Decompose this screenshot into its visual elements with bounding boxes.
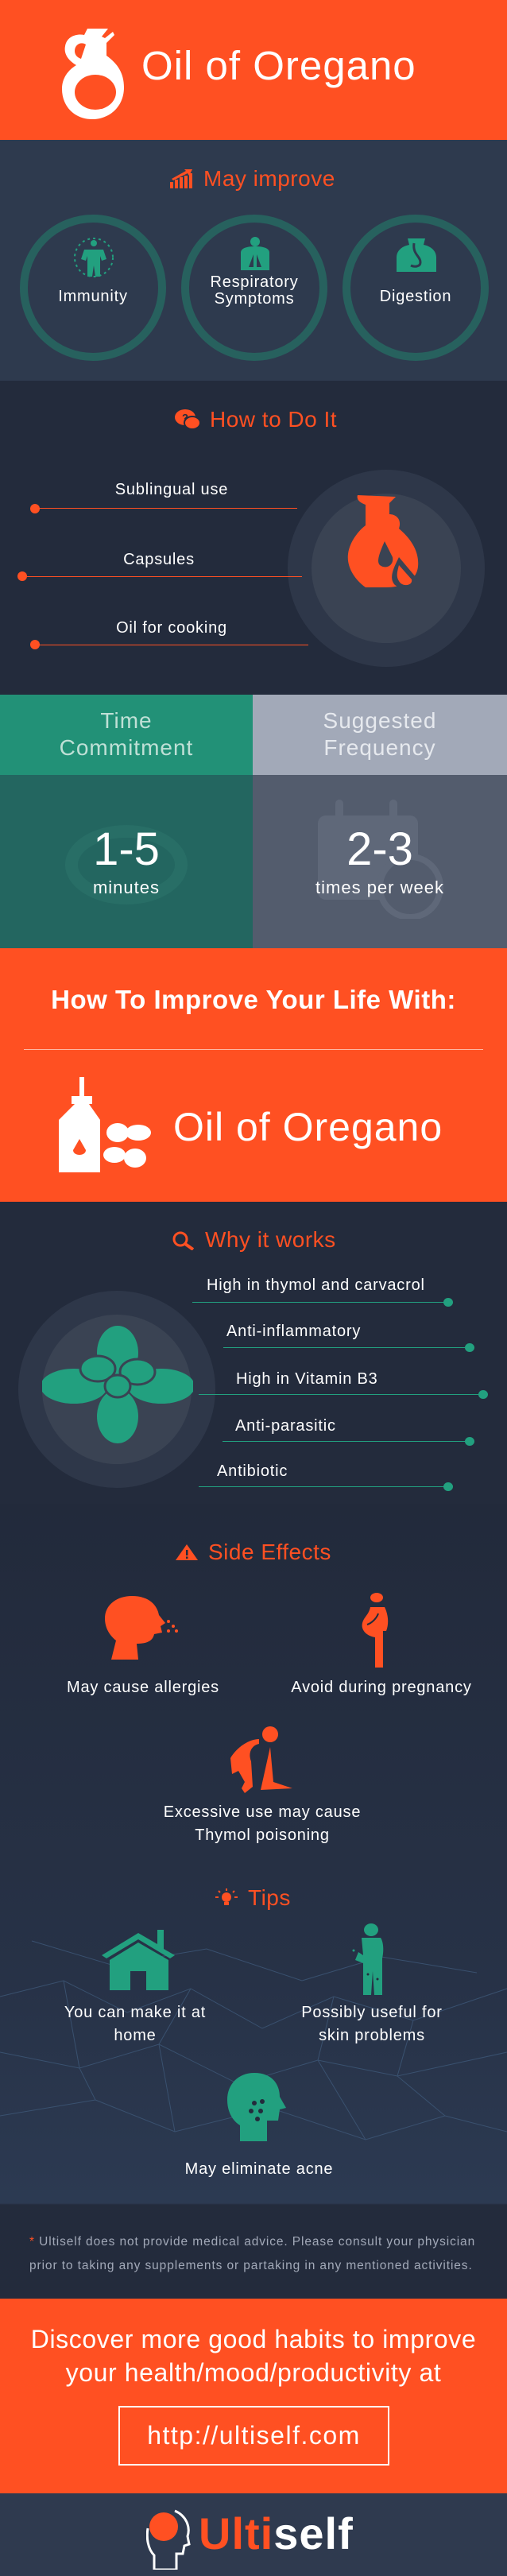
icon: dropper bottle and leaves <box>59 1077 151 1172</box>
icon: stomach <box>397 238 436 272</box>
disclaimer: * Ultiself does not provide medical advice. Please consult your physician <box>29 2235 475 2249</box>
url button: http://ultiself.com <box>147 2421 361 2450</box>
benefit: digestion: Digestion <box>380 288 451 305</box>
icon: clock faint <box>65 825 188 905</box>
panel: time commitment <box>0 695 253 948</box>
fact: anti-inflammatory <box>223 1323 474 1352</box>
side effect: pregnancy: Avoid during pregnancy <box>291 1679 472 1696</box>
side effect: thymol poisoning: Excessive use may cause <box>164 1803 361 1821</box>
heading: how to do it: How to Do It <box>210 407 337 432</box>
benefit: respiratory <box>181 215 327 361</box>
option: sublingual: Sublingual use <box>115 481 228 498</box>
fact: antibiotic: Antibiotic <box>217 1462 288 1480</box>
icon: jug with drops <box>348 495 418 587</box>
benefit: respiratory: Respiratory <box>210 273 299 291</box>
benefit: respiratory: Symptoms <box>215 290 294 308</box>
footer: logo <box>0 2493 507 2576</box>
panel: suggested frequency: 2-3 <box>346 823 413 875</box>
icon: oil jug <box>62 29 124 119</box>
panel: call to action <box>0 2299 507 2493</box>
fact: thymol: High in thymol and carvacrol <box>207 1276 425 1294</box>
panel: time commitment: Time <box>100 708 153 733</box>
icon: sneezing head <box>105 1596 178 1660</box>
cta text <box>31 2325 476 2387</box>
icon: brain head <box>146 2510 191 2570</box>
cta text: Discover more good habits to improve <box>31 2325 476 2353</box>
title: oil of oregano: Oil of Oregano <box>173 1105 443 1149</box>
jug circle <box>288 470 485 667</box>
side effect: allergies: May cause allergies <box>67 1679 219 1696</box>
side effect: pregnancy <box>291 1593 472 1696</box>
icon: lungs <box>241 237 269 270</box>
disclaimer <box>29 2235 475 2272</box>
fact: anti-parasitic <box>223 1417 474 1446</box>
fact: vitamin b3 <box>199 1370 488 1399</box>
panel: time commitment: minutes <box>93 877 160 897</box>
panel: side effects and tips <box>0 1504 507 2299</box>
fact: vitamin b3: High in Vitamin B3 <box>236 1370 378 1388</box>
heading: how to improve: How To Improve Your Life With: <box>51 985 456 1014</box>
fact: anti-inflammatory: Anti-inflammatory <box>226 1323 361 1340</box>
benefit: immunity <box>20 215 166 361</box>
logo text: Ultiself <box>199 2508 354 2559</box>
heading: tips: Tips <box>248 1885 291 1910</box>
tip: make at home: home <box>114 2027 157 2044</box>
tip: skin problems: skin problems <box>319 2027 425 2044</box>
network background <box>0 1941 507 2140</box>
panel: how to improve banner <box>0 948 507 1202</box>
side effect: thymol poisoning <box>164 1726 361 1844</box>
heading: may improve: May improve <box>203 166 335 191</box>
option: oil for cooking <box>30 619 308 649</box>
side effect: allergies <box>67 1596 219 1696</box>
heading: tips <box>215 1885 291 1910</box>
benefit: immunity: Immunity <box>58 288 128 305</box>
option: capsules: Capsules <box>123 551 195 568</box>
icon: person with skin problems <box>353 1923 383 1995</box>
heading: how to do it: ? <box>182 412 188 424</box>
option: capsules <box>17 551 302 581</box>
icon: immunity <box>74 238 114 277</box>
panel: time commitment: 1-5 <box>93 823 160 875</box>
fact: anti-parasitic: Anti-parasitic <box>235 1417 336 1435</box>
icon: head with acne <box>227 2073 286 2141</box>
panel: suggested frequency: times per week <box>315 877 444 897</box>
tip: acne <box>185 2073 333 2178</box>
title: Oil of Oregano <box>141 43 416 88</box>
heading: side effects: Side Effects <box>208 1540 331 1564</box>
panel: why it works <box>0 1202 507 1504</box>
option: sublingual <box>30 481 297 513</box>
icon: calendar faint <box>318 800 443 919</box>
side effect: thymol poisoning: Thymol poisoning <box>195 1826 330 1844</box>
disclaimer: prior to taking any supplements or partaking in any mentioned activities. <box>29 2259 473 2272</box>
panel: suggested frequency <box>253 695 507 948</box>
tip: make at home <box>64 1930 206 2044</box>
panel: may improve <box>0 140 507 381</box>
plant circle <box>18 1291 215 1488</box>
heading: why it works: Why it works <box>205 1227 336 1252</box>
tip: make at home: You can make it at <box>64 2004 206 2021</box>
panel: suggested frequency: Suggested <box>323 708 436 733</box>
icon: vomiting person <box>230 1726 292 1793</box>
url button <box>118 2406 389 2466</box>
panel: how to do it <box>0 381 507 695</box>
tip: skin problems: Possibly useful for <box>301 2004 443 2021</box>
header banner <box>0 0 507 140</box>
icon: house <box>102 1930 175 1990</box>
panel: time commitment: Commitment <box>60 735 193 760</box>
fact: antibiotic <box>199 1462 453 1491</box>
tip: skin problems <box>301 1923 443 2044</box>
option: oil for cooking: Oil for cooking <box>116 619 227 637</box>
icon: pregnant woman <box>362 1593 388 1668</box>
cta text: your health/mood/productivity at <box>66 2358 441 2387</box>
icon: oregano leaves <box>42 1326 193 1443</box>
fact: thymol <box>192 1276 453 1307</box>
benefit: digestion <box>343 215 489 361</box>
tip: acne: May eliminate acne <box>185 2160 333 2178</box>
panel: suggested frequency: Frequency <box>323 735 436 760</box>
